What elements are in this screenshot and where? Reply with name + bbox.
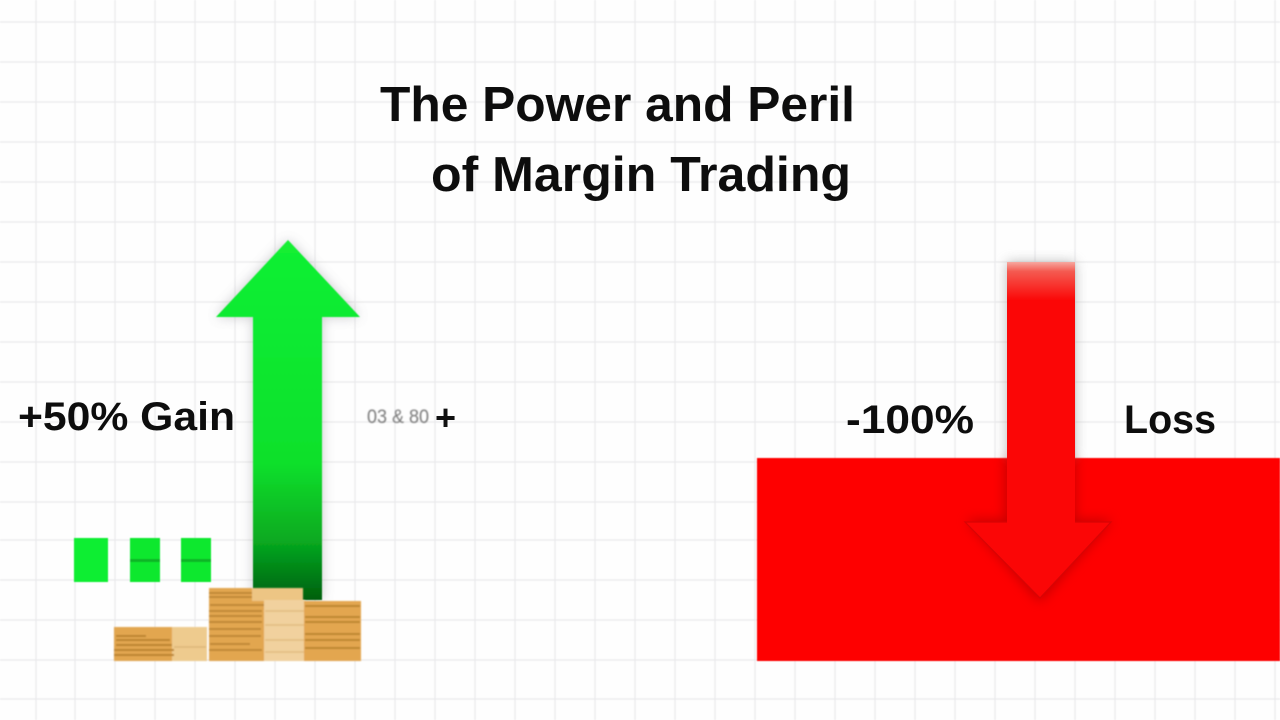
small stack: [114, 627, 207, 661]
right stack: [304, 601, 361, 661]
garbled small label: 03 & 80: [367, 407, 429, 428]
green squares: [74, 538, 211, 582]
gain label: +50% Gain: [18, 395, 235, 439]
garbled small label: +: [435, 397, 456, 438]
loss percentage label: -100%: [846, 398, 974, 442]
red down arrow: [965, 262, 1112, 602]
garbled small label: [367, 397, 456, 438]
title: [380, 78, 855, 202]
red loss block: [757, 458, 1280, 661]
coin stacks: [114, 588, 361, 661]
green up arrow: [216, 240, 360, 600]
loss label: Loss: [1124, 398, 1216, 442]
tall stack: [209, 588, 305, 661]
title: of Margin Trading: [431, 148, 851, 202]
title: The Power and Peril: [380, 78, 855, 132]
